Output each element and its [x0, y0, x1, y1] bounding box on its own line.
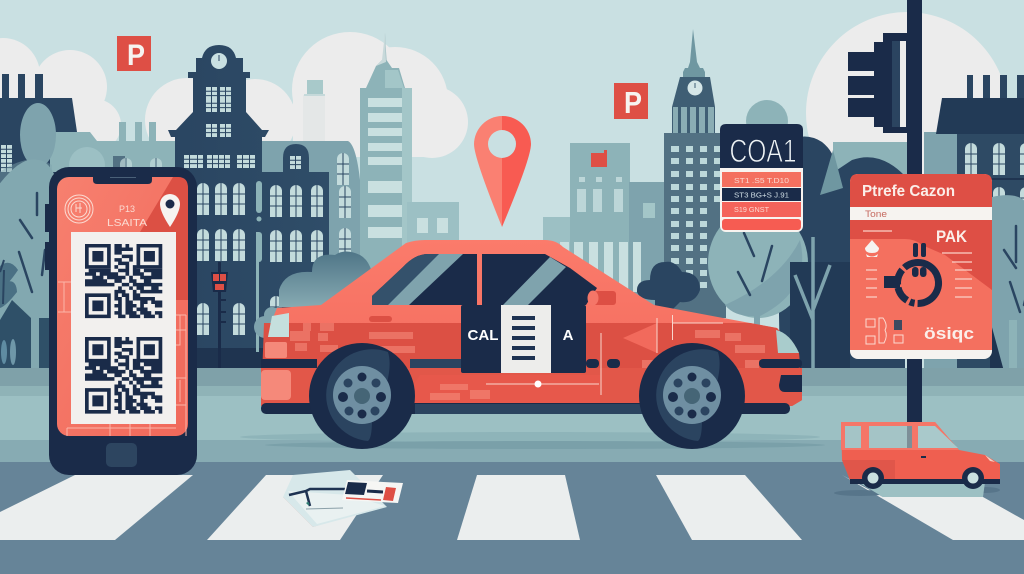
small icons: [866, 318, 903, 344]
crosswalk stripes: [0, 475, 1024, 540]
location pin: [474, 116, 531, 227]
van wheels: [862, 467, 984, 489]
car body: [261, 240, 802, 406]
traffic light: [848, 0, 922, 425]
headlights and tail lights: [268, 313, 289, 337]
clouds: [0, 32, 468, 162]
door panel with text: CAL: [468, 327, 498, 344]
info sign COA1: ST1 .S5 T.D10: [734, 176, 789, 185]
right clock tower: [664, 29, 726, 318]
info sign COA1: ST3 BG+S J.91: [734, 190, 789, 200]
parking sign centre: P: [624, 85, 642, 120]
thin pale post: [256, 232, 259, 352]
parking info panel: Ptrefe Cazon: [862, 183, 955, 200]
right side trees: [708, 137, 1024, 375]
pixel texture: [290, 323, 765, 400]
teal building behind main block: [262, 141, 360, 340]
sun disc: [806, 12, 1008, 214]
smartphone: LSAITA: [107, 217, 147, 229]
parking sign centre: [614, 83, 648, 120]
QR code bottom: [85, 337, 162, 414]
door panel with text: A: [563, 327, 574, 344]
main dark clock building: [50, 45, 330, 370]
brick pattern: [58, 282, 186, 436]
notch: [93, 177, 152, 184]
white QR panel: [71, 232, 176, 424]
street lamp: [211, 262, 228, 370]
left side trees: [0, 103, 65, 370]
skyscraper: [360, 33, 459, 310]
dark side stripes: [261, 359, 802, 368]
small red van: [834, 422, 1000, 497]
parking sign left: [117, 36, 151, 72]
back buildings centre: [543, 143, 669, 317]
road: [0, 462, 1024, 574]
side mirror: [588, 290, 616, 306]
windows: [372, 254, 477, 305]
panel lines: [863, 231, 972, 297]
bushes near car: [254, 252, 700, 338]
phone text: P13: [119, 204, 135, 214]
seal: [65, 195, 93, 223]
ground bands: [0, 368, 1024, 463]
red emblem: [591, 150, 607, 167]
info sign COA1: S19 GNST: [734, 205, 769, 214]
side buttons: [45, 204, 50, 270]
parking sign left: P: [127, 39, 145, 72]
smartphone: [45, 167, 197, 475]
drop icon: [865, 240, 879, 257]
info sign COA1: COA1: [730, 133, 796, 169]
parking info panel: [850, 174, 992, 359]
back buildings left: [0, 74, 325, 260]
car ground shadow: [240, 432, 825, 449]
door handle: [369, 316, 392, 322]
QR code top: [85, 244, 162, 318]
info sign COA1: [720, 124, 803, 232]
parking info panel: PAK: [936, 227, 968, 246]
power ring icon: [884, 243, 946, 311]
home button: [106, 443, 137, 467]
small ticket: [342, 480, 403, 503]
rear wheel: [309, 343, 415, 449]
clock face: [211, 53, 227, 69]
lower sill: [261, 403, 790, 414]
measurement lines: [486, 315, 723, 395]
right side buildings: [746, 75, 1024, 372]
door panel with text: [461, 305, 586, 373]
parking cards on ground: [283, 470, 403, 527]
red car: [261, 240, 802, 449]
parking info panel: ösiqc: [924, 324, 974, 343]
parking info panel: Tone: [865, 209, 887, 219]
front wheel: [639, 343, 745, 449]
phone pin: [160, 194, 180, 227]
